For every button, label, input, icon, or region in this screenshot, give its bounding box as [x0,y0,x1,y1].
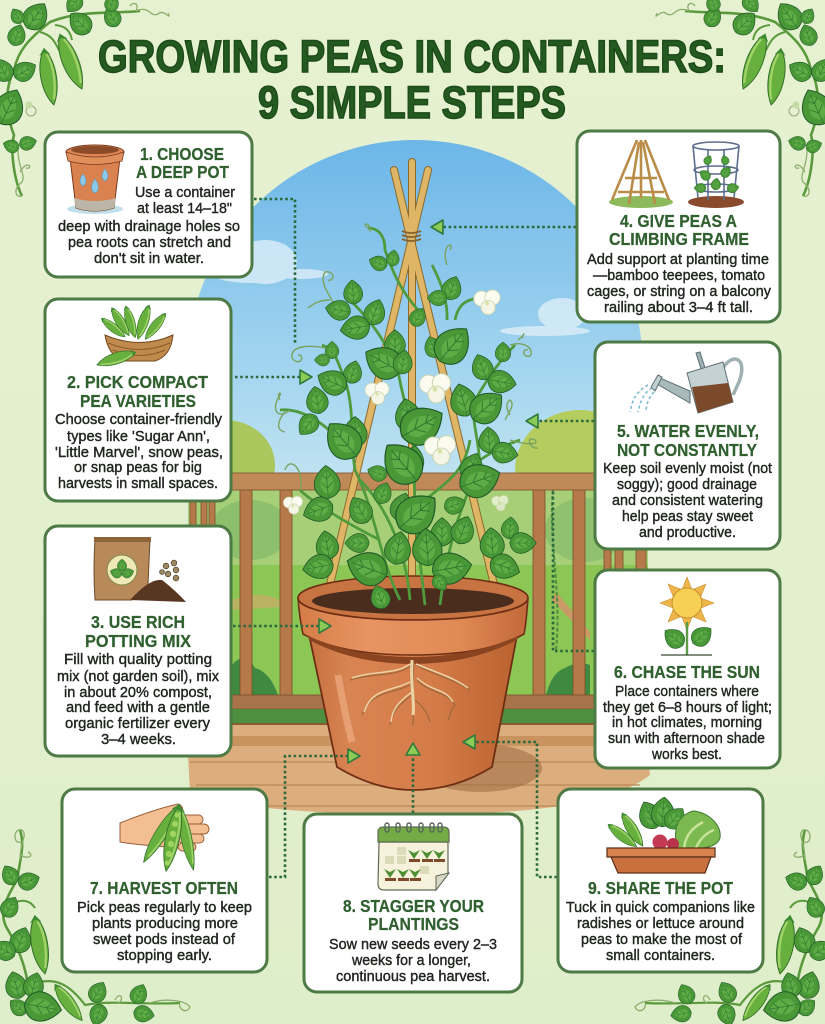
step 9 text [566,899,755,964]
step 3 text: 3–4 weeks. [101,731,176,748]
step 1 text [58,184,240,267]
step 5 text: soggy); good drainage [617,476,757,493]
panel: step 8 stagger your plantings [304,814,522,992]
step 2 heading: PEA VARIETIES [80,391,196,411]
step 3 text: Fill with quality potting [64,651,212,668]
connector arrow: step 4 [431,220,576,234]
step 3 heading: 3. USE RICH [91,612,185,632]
step 3 text: organic fertilizer every [65,715,210,732]
step 1 text: at least 14–18" [137,200,232,217]
step 5 heading: NOT CONSTANTLY [617,440,757,460]
connector arrow: step 8 [406,743,420,813]
step 4 heading [609,211,749,249]
step 2 text: types like 'Sugar Ann', [67,428,210,445]
step 9 text: Tuck in quick companions like [566,899,755,916]
step 8 heading: PLANTINGS [368,914,459,934]
step 9 text: small containers. [606,947,715,964]
icon: basket of pods [95,303,173,369]
step 9 heading: 9. SHARE THE POT [588,878,733,898]
connector arrow: step 9 [463,735,557,877]
step 3 text: mix (not garden soil), mix [57,668,219,685]
panel: step 5 water evenly [595,342,780,549]
step 3 heading [85,612,191,651]
connector arrow: step 2 [235,370,312,384]
step 8 text [329,936,497,985]
step 5 text: and consistent watering [612,492,763,509]
roots [350,662,470,725]
step 7 heading: 7. HARVEST OFTEN [90,878,238,898]
connector arrow: step 1 [254,199,295,343]
hedge strip [190,709,642,723]
step 3 text [57,651,219,748]
panel: step 4 give peas a climbing frame [577,131,780,322]
icon: sun and seedling [659,577,717,655]
panel: step 2 pick compact varieties [45,299,231,501]
panel: step 1 choose a deep pot [45,132,252,277]
step 2 heading: 2. PICK COMPACT [67,372,208,392]
step 6 text: Place containers where [615,683,759,700]
step 4 text: —bamboo teepees, tomato [593,267,765,284]
step 3 heading: POTTING MIX [85,631,191,651]
connector arrow: step 3 [233,619,331,633]
step 1 text: pea roots can stretch and [68,234,231,251]
step 5 heading: 5. WATER EVENLY, [617,421,759,441]
step 8 heading: 8. STAGGER YOUR [343,896,484,916]
clouds [210,240,590,336]
central illustration: balcony scene [175,140,650,814]
step 5 text: Keep soil evenly moist (not [603,460,773,477]
step 8 text: continuous pea harvest. [336,968,490,985]
step 6 text: in hot climates, morning [612,714,762,731]
pot back rim and soil [298,576,528,620]
background trees and lawn [175,410,648,710]
icon: hand with pods [120,801,209,872]
corner vine: bottom left [0,830,190,1024]
step 2 text: 'Little Marvel', snow peas, [55,444,223,461]
step 1 heading: 1. CHOOSE [140,144,224,164]
step 9 text: peas to make the most of [581,931,743,948]
title: 9 SIMPLE STEPS [258,77,566,128]
step 3 text: in about 20% compost, [64,684,212,701]
panel: step 3 use rich potting mix [45,526,231,756]
step 6 text: they get 6–8 hours of light; [603,699,772,716]
step 2 text: harvests in small spaces. [58,475,218,492]
step 6 text [603,683,772,763]
flowers [283,290,508,514]
step 7 text: stopping early. [117,947,212,964]
step 1 text: deep with drainage holes so [58,218,240,235]
step 8 text: weeks for a longer, [351,952,471,969]
step 3 text: and feed with a gentle [66,699,210,716]
step 5 text: help peas stay sweet [622,508,754,525]
step 8 heading [343,896,484,934]
step 7 text: sweet pods instead of [93,931,236,948]
icon: teepee and tomato cage [609,140,744,208]
step 6 text: works best. [651,746,722,763]
step 4 text [587,251,771,316]
icon: window box with companions [605,796,720,873]
connector arrow: step 5 [526,414,594,428]
step 5 text: and productive. [639,524,736,541]
step 6 heading: 6. CHASE THE SUN [614,662,760,682]
step 8 text: Sow new seeds every 2–3 [329,936,497,953]
deck [186,723,650,814]
panel: step 7 harvest often [62,789,267,972]
step 1 text: don't sit in water. [94,250,204,267]
step 1 heading [136,144,229,182]
step 2 text [55,411,223,492]
step 4 text: cages, or string on a balcony [587,283,771,300]
corner vine: bottom right [635,830,825,1024]
step 1 heading: A DEEP POT [136,162,229,182]
step 7 text: Pick peas regularly to keep [77,899,252,916]
corner vine: top right [656,0,825,196]
title: GROWING PEAS IN CONTAINERS: [98,31,726,82]
title [98,31,726,128]
panel: step 9 share the pot [558,789,763,972]
icon: watering can [630,352,742,413]
pea plant [275,224,538,612]
bamboo teepee [327,162,497,597]
sky dome [187,140,648,600]
panel: step 6 chase the sun [595,570,780,768]
icon: pot with drops [66,145,124,214]
step 5 heading [617,421,759,460]
step 1 text: Use a container [135,184,235,201]
step 9 text: radishes or lettuce around [577,915,744,932]
icon: calendar with seedlings [378,823,449,890]
step 7 text: plants producing more [92,915,238,932]
terracotta pot [298,598,528,790]
step 2 text: Choose container-friendly [55,411,222,428]
step 2 text: or snap peas for big [74,459,202,476]
step 7 text [77,899,252,964]
step 4 heading: 4. GIVE PEAS A [620,211,737,231]
connector arrow: step 7 [269,749,360,877]
icon: soil bag and seeds [94,537,186,602]
corner vine: top left [0,0,169,196]
step 4 text: railing about 3–4 ft tall. [604,299,753,316]
fence [176,473,646,709]
step 6 text: sun with afternoon shade [608,730,765,747]
step 2 heading [67,372,208,411]
connector arrow: step 6 [553,490,594,651]
step 4 text: Add support at planting time [587,251,769,268]
step 5 text [603,460,773,541]
step 4 heading: CLIMBING FRAME [609,229,749,249]
